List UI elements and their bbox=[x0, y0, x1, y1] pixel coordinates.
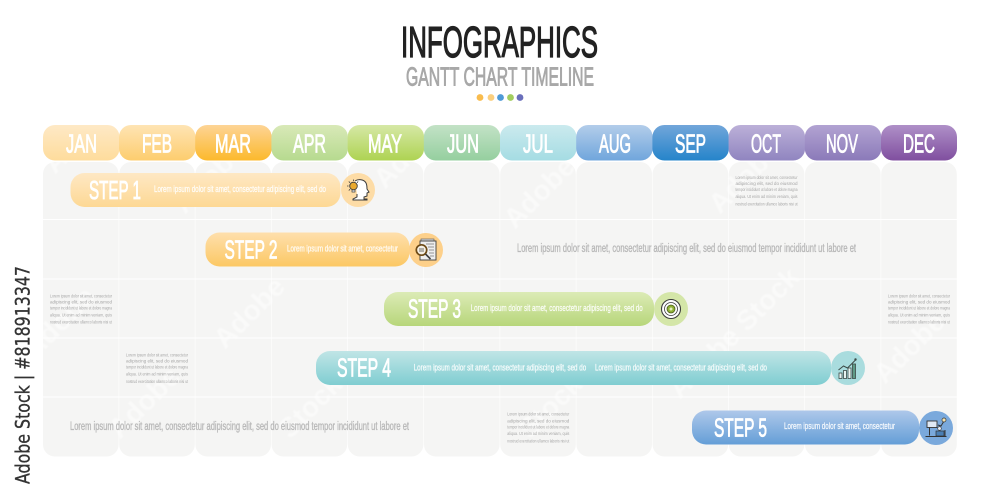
month: JAN bbox=[43, 125, 120, 160]
text block: January: adipiscing elit, sed do eiusmod bbox=[50, 299, 112, 304]
text block: January: Lorem ipsum dolor sit amet, consectetur bbox=[50, 293, 112, 298]
month: APR: APR bbox=[293, 130, 326, 158]
text block: December bbox=[888, 293, 951, 325]
text block: February: nostrud exercitation ullamco laboris nisi ut bbox=[126, 379, 189, 384]
text block: February: adipiscing elit, sed do eiusmod bbox=[126, 359, 188, 364]
text block: October bbox=[736, 175, 798, 206]
month header row bbox=[43, 125, 957, 160]
text block: October: nostrud exercitation ullamco laboris nisi ut bbox=[736, 201, 798, 206]
step 4 bar: STEP 4 bbox=[337, 355, 391, 383]
text block: January: tempor incididunt ut labore et dolore magna bbox=[50, 306, 112, 311]
text block: October: tempor incididunt ut labore et dolore magna bbox=[736, 187, 798, 192]
icon: presentation board with person bbox=[919, 411, 953, 445]
step 3 bar bbox=[384, 292, 654, 326]
step 1 bar bbox=[70, 173, 340, 207]
icon: target bbox=[654, 292, 688, 326]
stock watermarks: Stock bbox=[272, 368, 348, 444]
month: MAY: MAY bbox=[368, 130, 402, 158]
step 2 bar: STEP 2 bbox=[224, 236, 278, 264]
stock watermarks: Adobe bbox=[17, 281, 101, 364]
text block: July: nostrud exercitation ullamco laboris nisi ut bbox=[507, 438, 570, 443]
stock watermarks: Adobe bbox=[207, 271, 291, 354]
text block: February: Lorem ipsum dolor sit amet, consectetur bbox=[126, 353, 188, 358]
text block: December: nostrud exercitation ullamco laboris nisi ut bbox=[888, 320, 951, 325]
month: DEC bbox=[881, 125, 957, 160]
text block: July: aliqua. Ut enim ad minim veniam, quis bbox=[507, 431, 570, 436]
title dots bbox=[477, 94, 523, 101]
month: JUN bbox=[424, 125, 500, 160]
grid: month columns bbox=[43, 162, 957, 456]
stock watermarks: Adobe bbox=[102, 361, 186, 444]
month: JAN: JAN bbox=[66, 130, 97, 158]
text block: July: adipiscing elit, sed do eiusmod bbox=[507, 418, 570, 423]
stock watermarks: Adobe bbox=[867, 306, 951, 389]
month: MAY bbox=[348, 125, 424, 160]
text block: February: aliqua. Ut enim ad minim veniam, quis bbox=[126, 372, 189, 377]
stock watermarks: Stock bbox=[512, 368, 588, 444]
subtitle: GANTT CHART TIMELINE bbox=[406, 64, 594, 92]
stock watermarks: Adobe bbox=[37, 96, 121, 179]
step 4 bar: Lorem ipsum dolor sit amet, consectetur adipiscing elit, sed do bbox=[414, 362, 586, 373]
text block: December: adipiscing elit, sed do eiusmod bbox=[888, 299, 950, 304]
stock credit: Adobe Stock | #818913347 bbox=[12, 266, 34, 484]
step 2 bar bbox=[206, 232, 410, 266]
step 1 bar: STEP 1 bbox=[89, 177, 141, 205]
stock watermarks: Adobe Stock bbox=[662, 261, 806, 404]
month: AUG bbox=[576, 125, 653, 160]
text block: October: aliqua. Ut enim ad minim veniam, quis bbox=[736, 194, 798, 199]
step 5 bar bbox=[692, 410, 919, 444]
month: DEC: DEC bbox=[903, 130, 935, 158]
stock watermarks: Adobe bbox=[367, 111, 451, 194]
text block: January: aliqua. Ut enim ad minim veniam, quis bbox=[50, 312, 113, 317]
icon: head with light bulb bbox=[341, 173, 375, 207]
stock watermarks: Adobe Stock bbox=[702, 76, 846, 219]
step 4 bar bbox=[316, 351, 831, 385]
text block: December: aliqua. Ut enim ad minim veniam, quis bbox=[888, 312, 951, 317]
text block: January bbox=[50, 293, 113, 325]
text block: December: Lorem ipsum dolor sit amet, consectetur bbox=[888, 293, 950, 298]
month: NOV bbox=[805, 125, 881, 160]
text block: July: tempor incididunt ut labore et dolore magna bbox=[507, 424, 570, 429]
text block: February: tempor incididunt ut labore et dolore magna bbox=[126, 365, 188, 370]
step 2 bar: Lorem ipsum dolor sit amet, consectetur bbox=[287, 244, 398, 254]
stock watermarks bbox=[17, 76, 951, 444]
text block: February bbox=[126, 353, 189, 384]
month: JUN: JUN bbox=[447, 130, 479, 158]
month: SEP bbox=[652, 125, 729, 160]
step 3 bar: STEP 3 bbox=[408, 296, 461, 324]
step 1 bar: Lorem ipsum dolor sit amet, consectetur adipiscing elit, sed do bbox=[154, 184, 326, 195]
month: SEP: SEP bbox=[675, 130, 706, 158]
text block: January: nostrud exercitation ullamco laboris nisi ut bbox=[50, 320, 113, 325]
month: MAR: MAR bbox=[215, 130, 251, 158]
text block: October: Lorem ipsum dolor sit amet, consectetur bbox=[736, 175, 798, 180]
month: FEB bbox=[119, 125, 196, 160]
title: INFOGRAPHICS bbox=[401, 18, 598, 67]
step 5 bar: STEP 5 bbox=[714, 415, 767, 443]
month: NOV: NOV bbox=[826, 130, 858, 158]
month: JUL bbox=[500, 125, 576, 160]
step 3 bar: Lorem ipsum dolor sit amet, consectetur adipiscing elit, sed do bbox=[471, 303, 643, 314]
month: APR bbox=[271, 125, 348, 160]
text: row 5 description: Lorem ipsum dolor sit amet, consectetur adipiscing elit, sed do eiusmod tempor incididunt ut labore et bbox=[70, 421, 410, 433]
text block: December: tempor incididunt ut labore et dolore magna bbox=[888, 306, 950, 311]
month: FEB: FEB bbox=[142, 130, 172, 158]
month: AUG: AUG bbox=[599, 130, 631, 158]
icon: rising bar chart bbox=[831, 351, 865, 385]
stock watermarks: Adobe bbox=[167, 136, 251, 219]
month: OCT: OCT bbox=[751, 130, 781, 158]
month: OCT bbox=[729, 125, 805, 160]
month: MAR bbox=[195, 125, 272, 160]
month: JUL: JUL bbox=[523, 130, 553, 158]
icon: document with magnifier bbox=[409, 233, 443, 267]
text block: October: adipiscing elit, sed do eiusmod bbox=[736, 181, 798, 186]
stock watermarks: Adobe bbox=[497, 151, 581, 234]
step 4 bar: Lorem ipsum dolor sit amet, consectetur adipiscing elit, sed do bbox=[595, 362, 767, 373]
step 5 bar: Lorem ipsum dolor sit amet, consectetur bbox=[784, 421, 895, 432]
text block: July bbox=[507, 412, 570, 443]
text block: July: Lorem ipsum dolor sit amet, consectetur bbox=[507, 412, 570, 417]
